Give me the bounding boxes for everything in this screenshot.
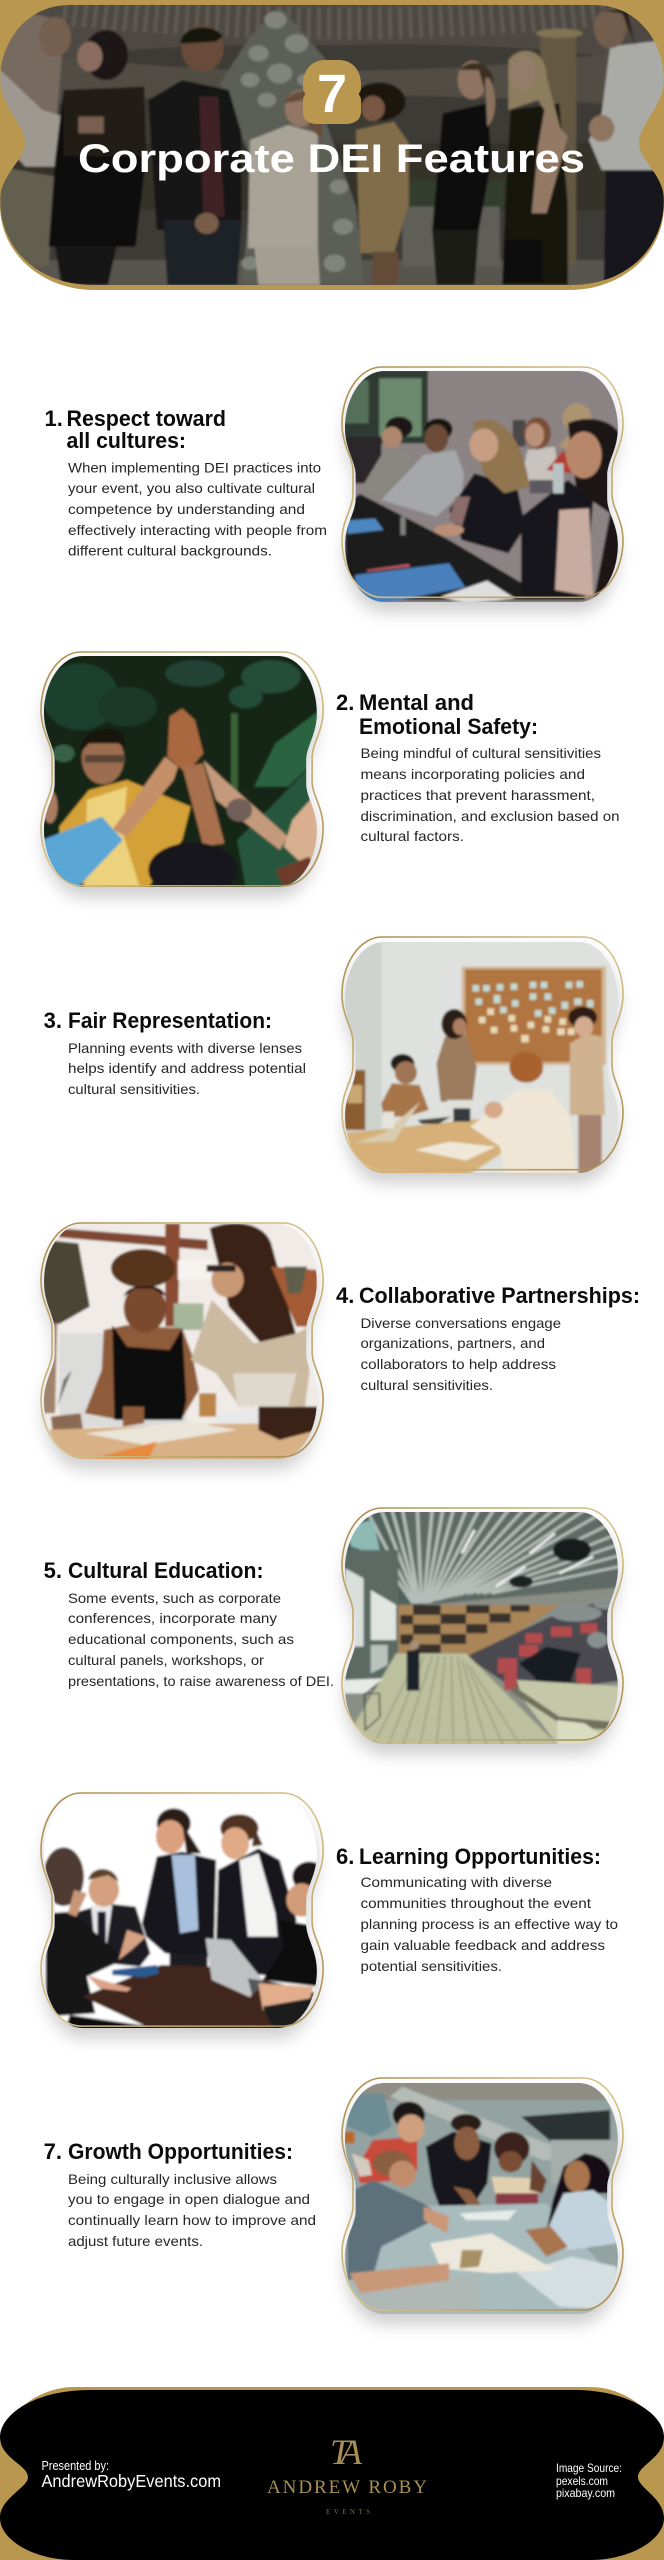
presented by: AndrewRobyEvents.com bbox=[42, 2471, 221, 2491]
feature 3 panel bbox=[44, 937, 627, 1183]
number badge bbox=[303, 60, 361, 124]
feature 7 photo: team around documents bbox=[339, 2077, 627, 2324]
feature 6 panel bbox=[38, 1790, 618, 2038]
feature 3 gold frame bbox=[342, 937, 623, 1170]
feature 2 heading: 2. bbox=[336, 690, 354, 715]
feature 1 photo: conference table bbox=[339, 367, 627, 612]
logo subtitle: EVENTS bbox=[326, 2508, 370, 2516]
logo monogram: A bbox=[338, 2432, 363, 2472]
feature 1 heading: all cultures: bbox=[66, 428, 186, 453]
feature 7 text: Being culturally inclusive allows bbox=[68, 2171, 277, 2187]
feature 6 heading: 6. bbox=[336, 1844, 354, 1869]
feature 5 heading: Cultural Education: bbox=[68, 1558, 264, 1583]
feature 6 text: Communicating with diverse bbox=[360, 1874, 552, 1890]
feature 4 text: organizations, partners, and bbox=[360, 1335, 545, 1351]
badge shape bbox=[303, 60, 361, 124]
presented by: Presented by: bbox=[42, 2459, 109, 2473]
feature 3 heading: 3. bbox=[44, 1008, 62, 1033]
image source bbox=[556, 2461, 622, 2500]
feature 2 heading: Mental and bbox=[359, 690, 474, 715]
feature 4 text: Diverse conversations engage bbox=[360, 1315, 561, 1331]
feature 6 heading: Learning Opportunities: bbox=[359, 1844, 601, 1869]
hero gold backing shape bbox=[0, 0, 664, 290]
feature 5 heading: 5. bbox=[44, 1558, 62, 1583]
feature 2 photo: high five bbox=[38, 652, 326, 897]
feature 2 text: discrimination, and exclusion based on bbox=[360, 808, 620, 824]
feature 5 gold frame bbox=[342, 1508, 623, 1740]
feature 7 panel bbox=[44, 2077, 627, 2324]
feature 1 text bbox=[68, 460, 327, 558]
badge number: 7 bbox=[317, 64, 347, 124]
feature 4 panel bbox=[38, 1220, 640, 1469]
image source: Image Source: bbox=[556, 2461, 622, 2475]
feature 6 text: planning process is an effective way to bbox=[360, 1916, 618, 1932]
feature 5 text: presentations, to raise awareness of DEI. bbox=[68, 1673, 334, 1689]
feature 2 text: means incorporating policies and bbox=[360, 766, 585, 782]
feature 7 text: continually learn how to improve and bbox=[68, 2212, 316, 2228]
feature 6 text bbox=[360, 1874, 618, 1974]
hero banner bbox=[0, 0, 664, 290]
feature 3 text: helps identify and address potential bbox=[68, 1060, 306, 1076]
feature 1 panel bbox=[44, 367, 627, 612]
feature 7 heading: Growth Opportunities: bbox=[68, 2139, 293, 2164]
hero photo: celebrating group bbox=[0, 0, 664, 290]
feature 2 text: Being mindful of cultural sensitivities bbox=[360, 745, 601, 761]
feature 6 photo: business handshake bbox=[38, 1790, 326, 2038]
logo bbox=[267, 2432, 427, 2516]
main title: Corporate DEI Features bbox=[78, 137, 585, 181]
feature 3 text bbox=[68, 1040, 306, 1097]
feature 5 text: conferences, incorporate many bbox=[68, 1610, 277, 1626]
feature 5 panel bbox=[44, 1507, 627, 1754]
feature 2 text bbox=[360, 745, 620, 844]
feature 1 text: your event, you also cultivate cultural bbox=[68, 480, 315, 496]
logo wordmark: ANDREW ROBY bbox=[267, 2477, 427, 2498]
feature 5 photo: lecture hall bbox=[339, 1507, 627, 1754]
feature 1 heading: Respect toward bbox=[66, 406, 226, 431]
feature 7 heading: 7. bbox=[44, 2139, 62, 2164]
feature 4 text bbox=[360, 1315, 561, 1393]
feature 6 text: gain valuable feedback and address bbox=[360, 1937, 605, 1953]
feature 6 text: communities throughout the event bbox=[360, 1895, 591, 1911]
footer gold backing bbox=[0, 2387, 664, 2560]
feature 3 photo: cork board meeting bbox=[339, 937, 627, 1183]
feature 1 heading: 1. bbox=[44, 406, 63, 431]
feature 1 gold frame bbox=[342, 367, 623, 597]
feature 4 heading: 4. bbox=[336, 1283, 354, 1308]
feature 3 heading: Fair Representation: bbox=[68, 1008, 272, 1033]
feature 6 gold frame bbox=[41, 1793, 323, 2026]
image source: pixabay.com bbox=[556, 2486, 615, 2500]
feature 7 gold frame bbox=[342, 2078, 623, 2310]
feature 4 photo: two women writing bbox=[38, 1220, 326, 1469]
image source: pexels.com bbox=[556, 2474, 608, 2488]
feature 1 text: effectively interacting with people from bbox=[68, 522, 327, 538]
feature 5 text: Some events, such as corporate bbox=[68, 1590, 281, 1606]
feature 7 text: adjust future events. bbox=[68, 2233, 203, 2249]
feature 2 heading: Emotional Safety: bbox=[359, 714, 538, 739]
feature 5 text: educational components, such as bbox=[68, 1631, 294, 1647]
feature 7 text: you to engage in open dialogue and bbox=[68, 2191, 310, 2207]
feature 1 text: When implementing DEI practices into bbox=[68, 460, 321, 476]
footer bbox=[0, 2387, 664, 2560]
feature 5 text bbox=[68, 1590, 334, 1689]
feature 5 text: cultural panels, workshops, or bbox=[68, 1652, 264, 1668]
feature 2 panel bbox=[38, 652, 620, 897]
logo monogram bbox=[330, 2432, 363, 2472]
logo monogram: T bbox=[330, 2432, 353, 2472]
feature 4 gold frame bbox=[41, 1223, 323, 1457]
feature 2 text: practices that prevent harassment, bbox=[360, 787, 595, 803]
feature 3 text: cultural sensitivities. bbox=[68, 1081, 200, 1097]
feature 7 text bbox=[68, 2171, 316, 2249]
feature 4 text: collaborators to help address bbox=[360, 1356, 556, 1372]
feature 2 gold frame bbox=[41, 652, 323, 886]
feature 1 text: different cultural backgrounds. bbox=[68, 542, 272, 558]
presented by bbox=[42, 2459, 221, 2491]
feature 2 text: cultural factors. bbox=[360, 828, 464, 844]
feature 4 text: cultural sensitivities. bbox=[360, 1377, 493, 1393]
feature 1 heading bbox=[44, 406, 226, 453]
feature 1 text: competence by understanding and bbox=[68, 501, 305, 517]
feature 3 text: Planning events with diverse lenses bbox=[68, 1040, 302, 1056]
feature 2 heading bbox=[336, 690, 538, 739]
footer black shape bbox=[0, 2390, 664, 2560]
feature 6 text: potential sensitivities. bbox=[360, 1958, 502, 1974]
feature 4 heading: Collaborative Partnerships: bbox=[359, 1283, 640, 1308]
